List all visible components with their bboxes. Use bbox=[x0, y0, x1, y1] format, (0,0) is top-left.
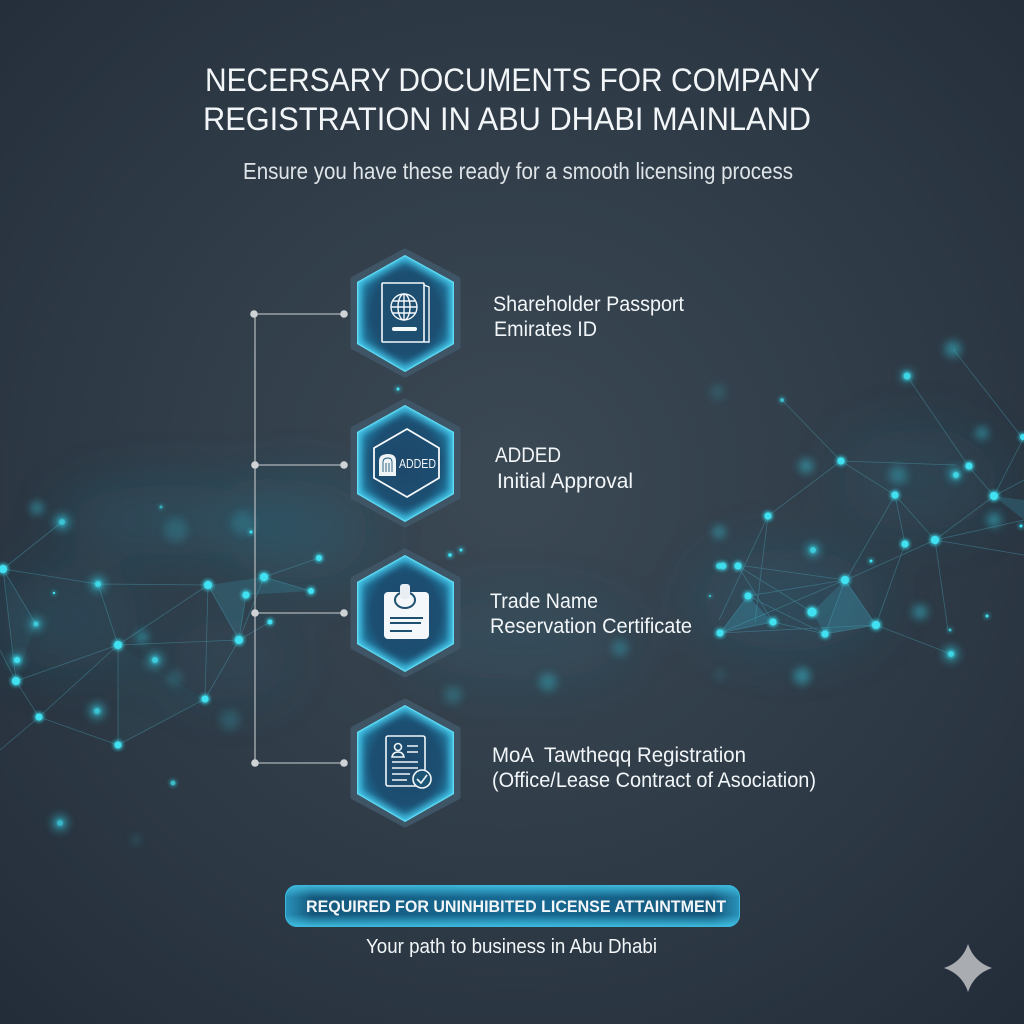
label 4 bbox=[492, 744, 816, 792]
hexagon 1: passport icon bbox=[353, 251, 458, 375]
callout banner: REQUIRED FOR UNINHIBITED LICENSE ATTAINTMENT bbox=[306, 897, 727, 916]
hexagon 2: ADDED badge bbox=[353, 401, 458, 525]
icon: passport bbox=[382, 283, 429, 342]
title bbox=[203, 62, 820, 137]
label 2: ADDED bbox=[495, 444, 561, 467]
label 1: Shareholder Passport bbox=[493, 293, 684, 316]
network: right cluster bbox=[396, 341, 1024, 704]
subtitle: Ensure you have these ready for a smooth licensing process bbox=[243, 158, 793, 184]
hexagon 4: contract icon bbox=[353, 701, 458, 825]
icon: ADDED logo: ADDED bbox=[399, 456, 436, 471]
label 2: Initial Approval bbox=[497, 470, 633, 493]
icon: contract with check bbox=[386, 736, 431, 788]
mesh fill bbox=[825, 580, 876, 634]
label 4: MoA Tawtheqq Registration bbox=[492, 744, 746, 767]
footer tagline: Your path to business in Abu Dhabi bbox=[366, 936, 657, 958]
title: NECERSARY DOCUMENTS FOR COMPANY bbox=[205, 62, 820, 98]
icon: sparkle watermark bbox=[944, 944, 992, 992]
icon: badge document bbox=[384, 584, 429, 639]
title: REGISTRATION IN ABU DHABI MAINLAND bbox=[203, 101, 811, 137]
hexagon 3: certificate icon bbox=[353, 551, 458, 675]
label 3: Trade Name bbox=[490, 590, 598, 613]
label 3 bbox=[490, 590, 692, 638]
label 1: Emirates ID bbox=[494, 318, 597, 341]
mesh fill bbox=[208, 577, 311, 640]
teal haze bbox=[0, 430, 1000, 700]
label 3: Reservation Certificate bbox=[490, 615, 692, 638]
connector lines bbox=[250, 310, 348, 767]
callout banner bbox=[285, 885, 740, 927]
label 4: (Office/Lease Contract of Asociation) bbox=[492, 769, 816, 792]
label 1 bbox=[493, 293, 684, 341]
network: left cluster bbox=[0, 502, 322, 845]
label 2 bbox=[495, 444, 633, 493]
